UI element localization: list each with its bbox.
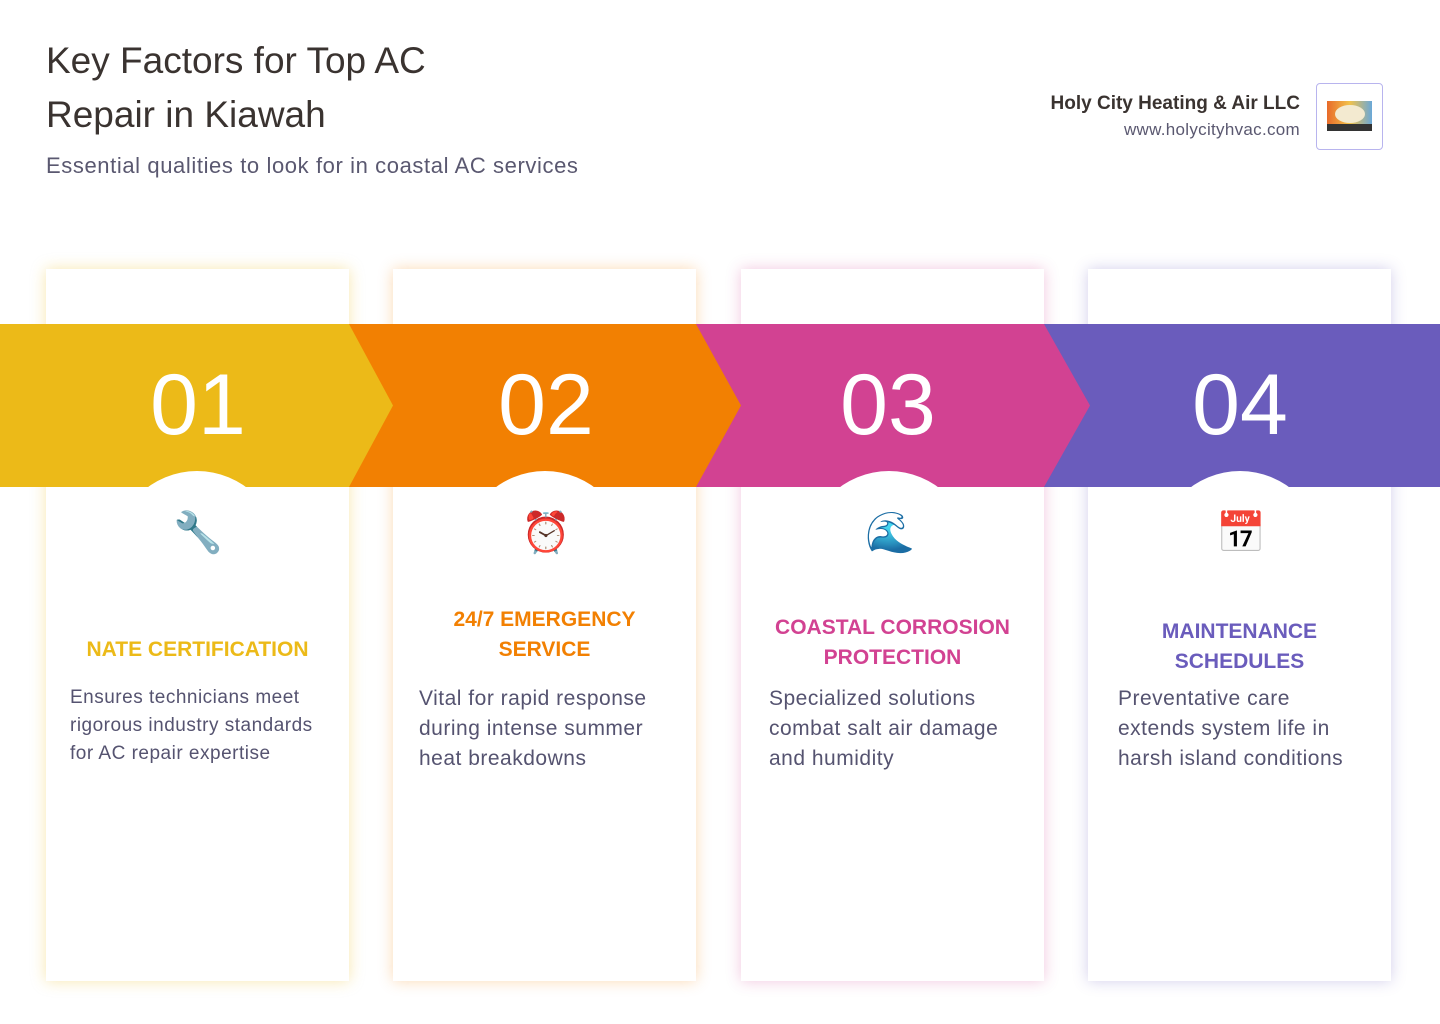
- text: harsh island conditions: [1118, 747, 1343, 770]
- text: SCHEDULES: [1175, 650, 1304, 673]
- brand block: [1051, 83, 1383, 150]
- text: during intense summer: [419, 717, 643, 740]
- text: Vital for rapid response: [419, 687, 647, 710]
- text: and humidity: [769, 747, 894, 770]
- text: heat breakdowns: [419, 747, 586, 770]
- text: 02: [498, 357, 594, 453]
- brand url: www.holycityhvac.com: [1124, 120, 1300, 139]
- text: Ensures technicians meet: [70, 687, 300, 708]
- text: for AC repair expertise: [70, 743, 271, 764]
- text: extends system life in: [1118, 717, 1330, 740]
- panel 3 text: [769, 616, 1010, 770]
- subtitle: Essential qualities to look for in coastal AC services: [46, 153, 579, 178]
- text: Specialized solutions: [769, 687, 976, 710]
- text: 04: [1192, 357, 1288, 453]
- cards: [46, 269, 349, 981]
- title: [46, 40, 426, 135]
- text: COASTAL CORROSION: [775, 616, 1010, 639]
- text: 03: [840, 357, 936, 453]
- circles: [114, 471, 280, 637]
- text: Preventative care: [1118, 687, 1290, 710]
- panel 4 text: [1118, 620, 1343, 770]
- text: 24/7 EMERGENCY: [453, 608, 636, 631]
- panel 2 text: [419, 608, 647, 770]
- text: NATE CERTIFICATION: [86, 638, 309, 661]
- text: SERVICE: [499, 638, 590, 661]
- icons: 🔧: [173, 509, 223, 556]
- text: rigorous industry standards: [70, 715, 313, 736]
- brand name: Holy City Heating & Air LLC: [1051, 93, 1300, 114]
- title: Key Factors for Top AC: [46, 40, 426, 81]
- text: combat salt air damage: [769, 717, 998, 740]
- text: ⏰: [521, 509, 571, 556]
- text: PROTECTION: [824, 646, 961, 669]
- title: Repair in Kiawah: [46, 94, 326, 135]
- text: MAINTENANCE: [1162, 620, 1317, 643]
- numbers: 01: [150, 357, 246, 453]
- text: 📅: [1216, 509, 1266, 556]
- logo: [1316, 83, 1383, 150]
- panel 1 text: [70, 638, 313, 764]
- arrow band: [0, 324, 1440, 487]
- text: 🌊: [865, 509, 915, 556]
